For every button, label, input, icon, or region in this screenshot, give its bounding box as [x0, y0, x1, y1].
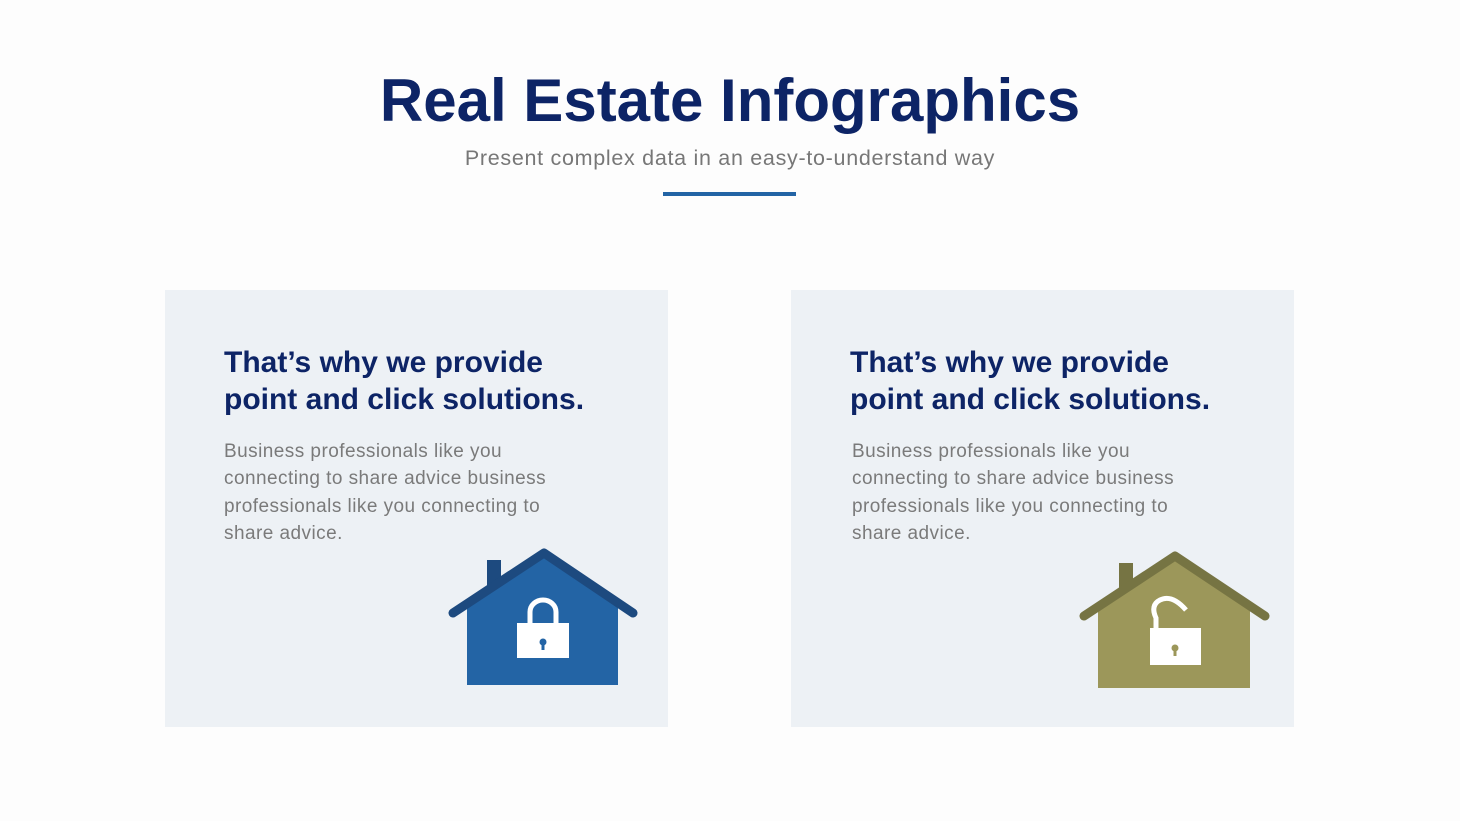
icon: locked house: [453, 553, 633, 685]
text block: [852, 441, 1174, 544]
text block: connecting to share advice business: [852, 468, 1174, 489]
heading: [850, 346, 1210, 416]
text block: share advice.: [224, 523, 343, 544]
heading: That’s why we provide: [224, 346, 543, 379]
text block: [224, 441, 546, 544]
text block: Business professionals like you: [852, 441, 1130, 462]
heading: point and click solutions.: [224, 383, 584, 416]
text block: professionals like you connecting to: [224, 496, 540, 517]
heading: point and click solutions.: [850, 383, 1210, 416]
heading: That’s why we provide: [850, 346, 1169, 379]
panel: left: [165, 290, 668, 727]
title: Real Estate Infographics: [380, 67, 1080, 134]
text block: share advice.: [852, 523, 971, 544]
panel: right: [791, 290, 1294, 727]
text block: professionals like you connecting to: [852, 496, 1168, 517]
accent line: [663, 192, 796, 196]
subtitle: Present complex data in an easy-to-understand way: [465, 146, 995, 170]
text block: connecting to share advice business: [224, 468, 546, 489]
text block: Business professionals like you: [224, 441, 502, 462]
icon: unlocked house: [1084, 556, 1265, 688]
heading: [224, 346, 584, 416]
